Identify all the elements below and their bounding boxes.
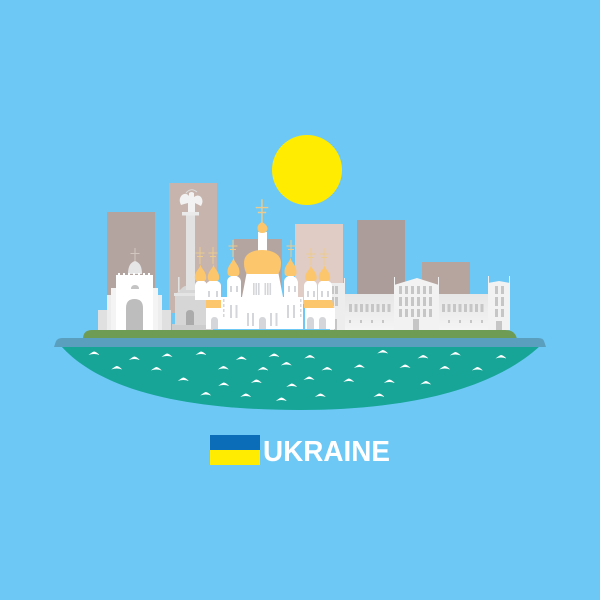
ground bbox=[83, 330, 517, 339]
cross bbox=[130, 248, 140, 261]
country name: UKRAINE bbox=[263, 436, 390, 468]
small window bbox=[131, 285, 139, 289]
right block bbox=[488, 281, 510, 330]
main body bbox=[218, 271, 303, 329]
waves bbox=[88, 350, 506, 401]
onion domes bbox=[195, 222, 330, 281]
windows and doors bbox=[208, 283, 329, 329]
cathedral bbox=[195, 199, 335, 329]
sun bbox=[272, 135, 342, 205]
background towers bbox=[107, 183, 470, 313]
independence column bbox=[172, 190, 213, 330]
shore strip bbox=[54, 338, 546, 347]
right palace bbox=[330, 276, 510, 330]
gold bands bbox=[206, 300, 221, 308]
center block bbox=[394, 278, 439, 330]
crosses bbox=[196, 199, 328, 265]
ukraine flag bbox=[210, 435, 260, 465]
arch door bbox=[126, 299, 143, 330]
tower bodies bbox=[195, 232, 335, 329]
dome bbox=[128, 261, 142, 274]
central block bbox=[116, 273, 153, 330]
main dome bbox=[244, 250, 281, 274]
angel statue bbox=[180, 192, 202, 212]
wings bbox=[345, 294, 394, 330]
left block bbox=[330, 283, 345, 330]
left monument building bbox=[98, 248, 171, 330]
sea bbox=[61, 346, 540, 410]
windows bbox=[331, 286, 504, 330]
